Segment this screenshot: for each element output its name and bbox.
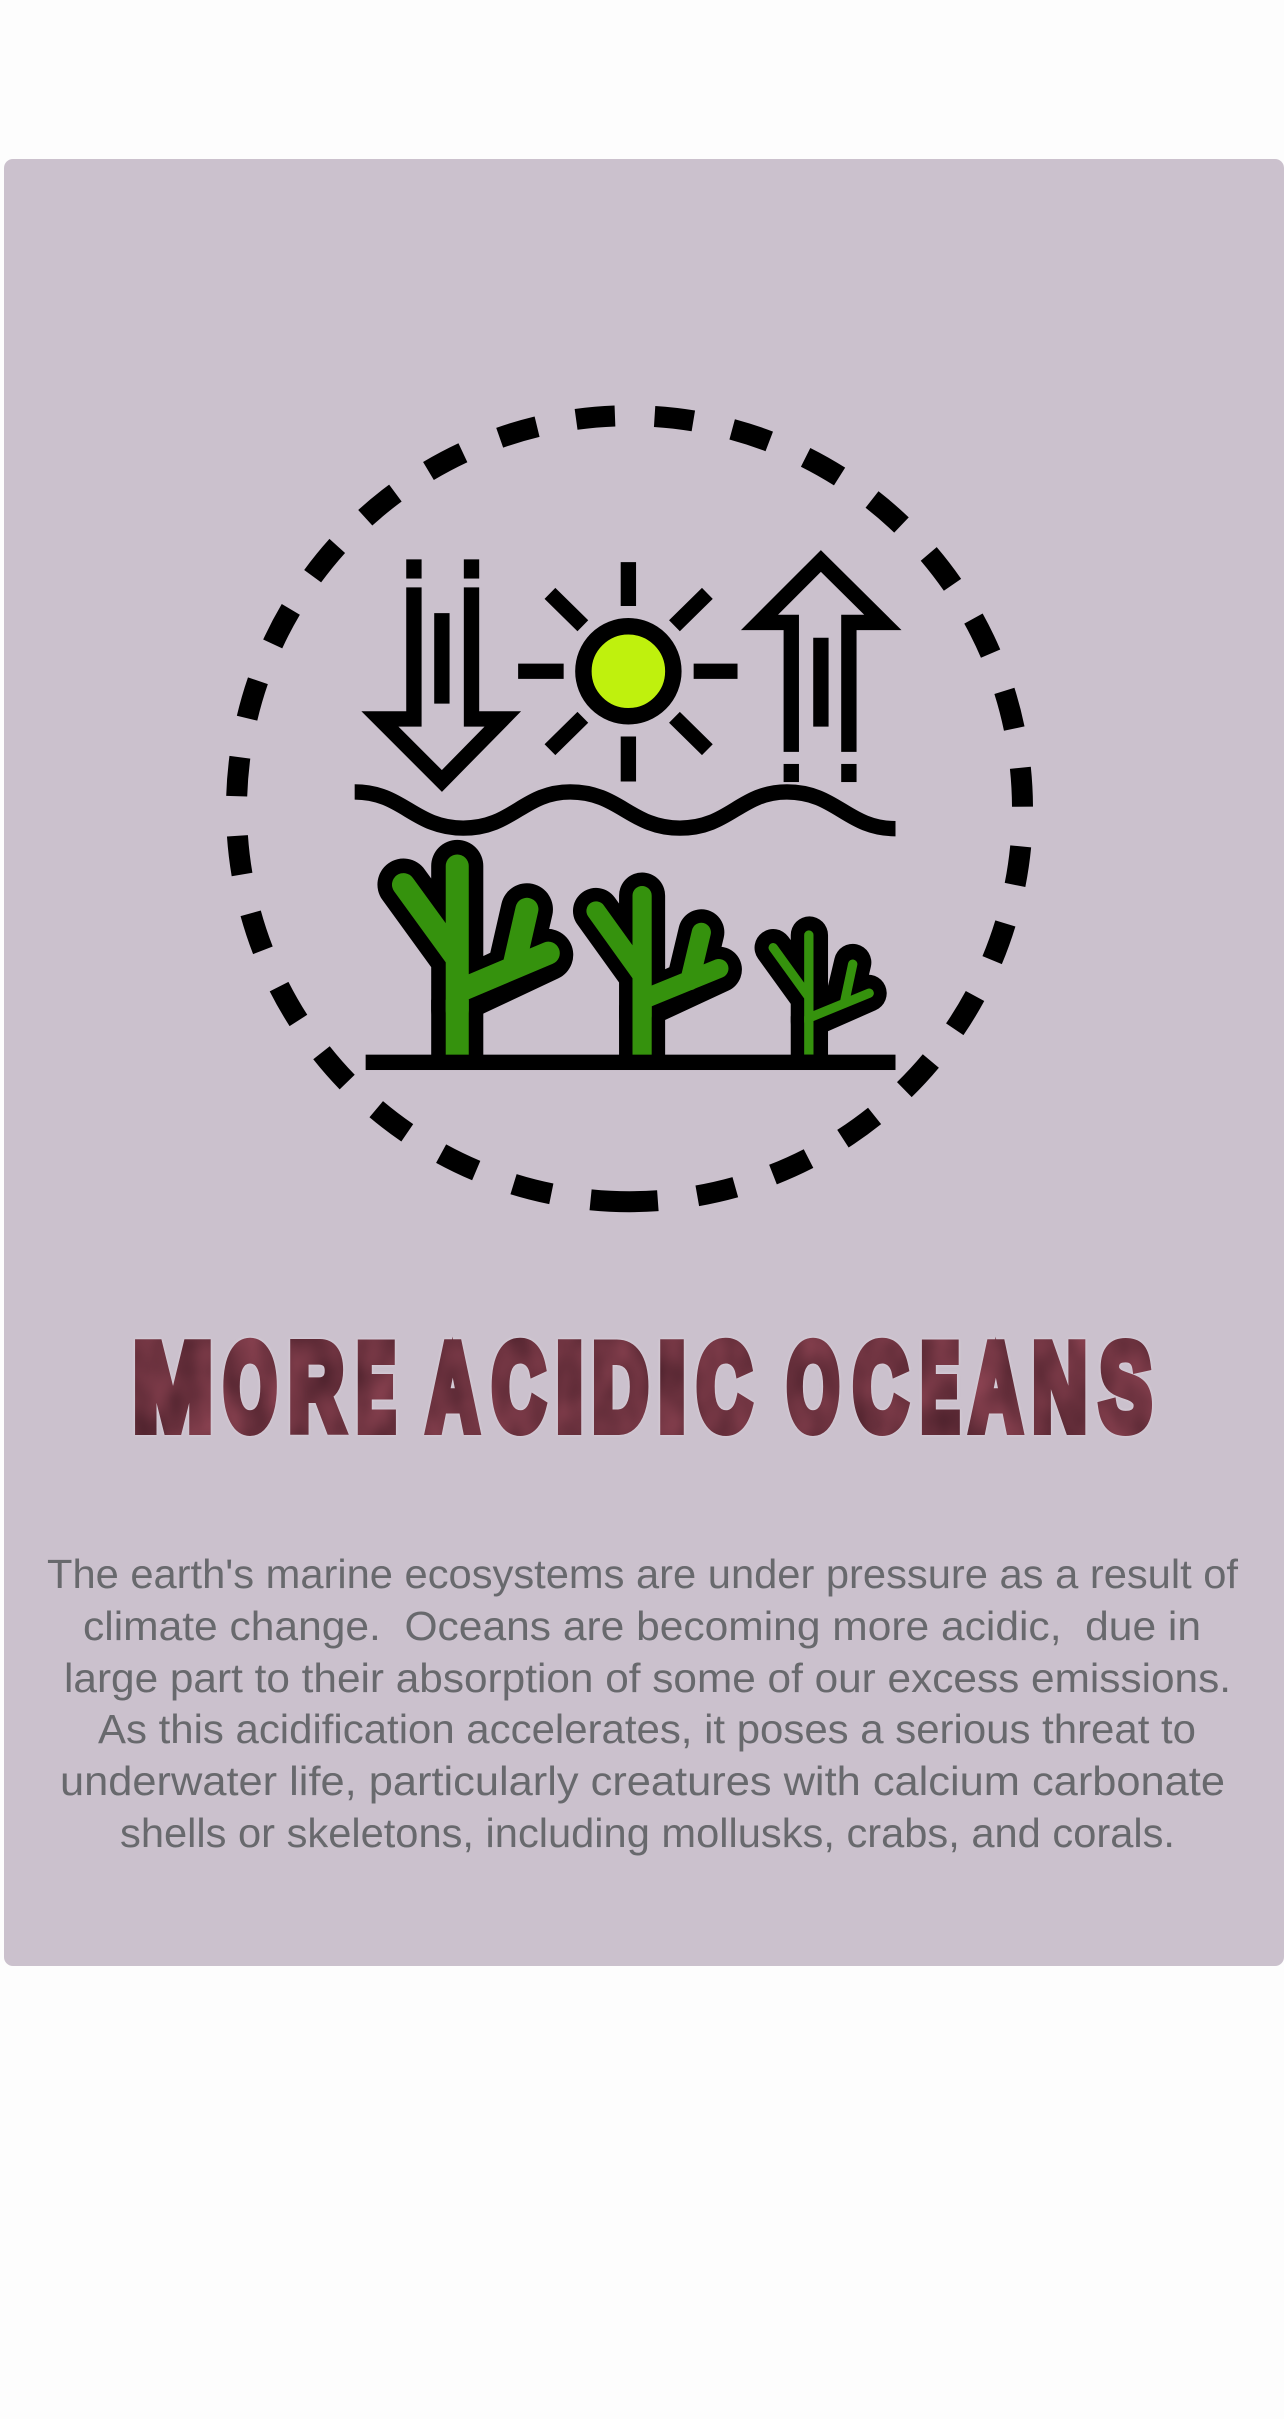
icon: dashed circle ring (237, 416, 1022, 1202)
title: O (224, 1319, 276, 1455)
text block: description: climate change. Oceans are becoming more acidic, due in (83, 1603, 1201, 1649)
text block: description: shells or skeletons, including mollusks, crabs, and corals. (120, 1810, 1175, 1856)
title: I (658, 1319, 686, 1455)
text block: description: large part to their absorption of some of our excess emissions. (64, 1655, 1231, 1701)
icon: wave line (355, 792, 895, 829)
icon: sun (518, 562, 738, 782)
panel: background card (4, 159, 1284, 1966)
title: E (921, 1319, 959, 1455)
text block: description: As this acidification accelerates, it poses a serious threat to (98, 1706, 1196, 1752)
icon: down arrow (380, 559, 503, 781)
title: S (1100, 1319, 1151, 1455)
text block: description (47, 1551, 1239, 1856)
icon: up arrow (759, 561, 883, 782)
title: N (1033, 1319, 1087, 1455)
title: O (787, 1319, 839, 1455)
icon: small coral (773, 935, 869, 1056)
title: M (133, 1319, 212, 1455)
title: C (854, 1319, 907, 1455)
icon: large coral (403, 866, 548, 1056)
title: I (556, 1319, 583, 1455)
icon: ocean acidification pictogram (355, 559, 895, 1070)
icon: medium coral (596, 896, 719, 1056)
title: R (289, 1319, 344, 1455)
title: C (492, 1319, 545, 1455)
title: E (357, 1319, 395, 1455)
icon: seabed line (366, 1055, 895, 1070)
title: A (970, 1319, 1021, 1455)
title: A (427, 1319, 478, 1455)
text block: description: The earth's marine ecosystems are under pressure as a result of (47, 1551, 1239, 1597)
title: D (593, 1319, 648, 1455)
title: C (697, 1319, 751, 1455)
text block: description: underwater life, particularly creatures with calcium carbonate (60, 1758, 1225, 1804)
